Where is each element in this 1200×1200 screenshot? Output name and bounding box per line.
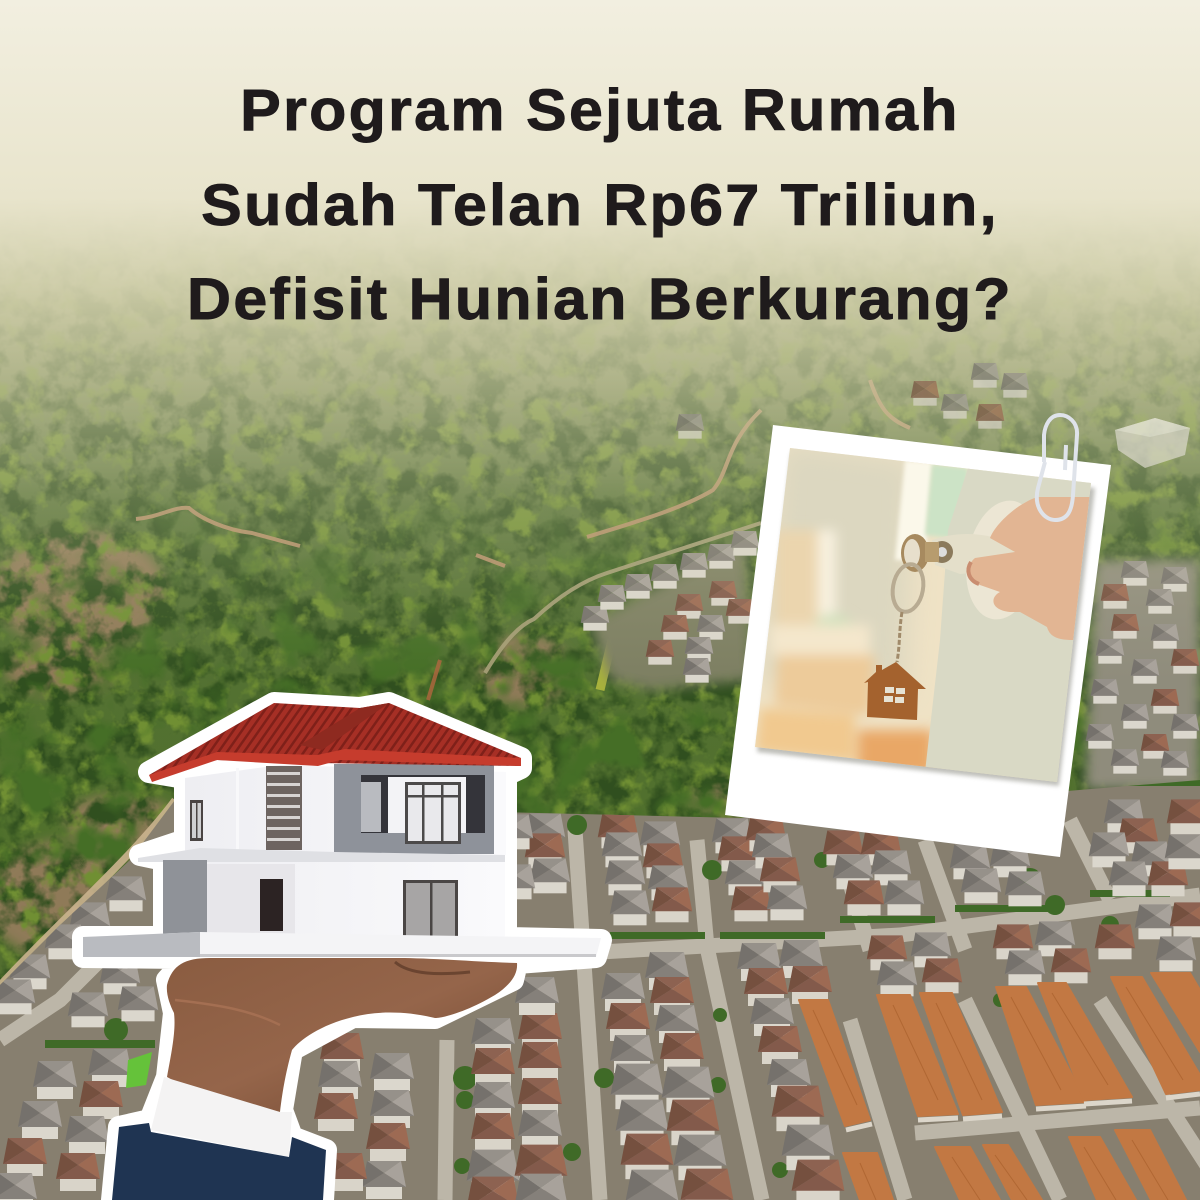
shutters <box>266 766 302 850</box>
platform <box>83 932 601 957</box>
shirt cuff <box>151 1077 292 1157</box>
title: Program Sejuta Rumah <box>240 78 960 143</box>
suit sleeve <box>112 1123 326 1200</box>
key <box>901 534 929 572</box>
wooden house keychain <box>864 662 926 720</box>
bare earth clearings <box>0 530 750 960</box>
bright hedge <box>600 640 612 690</box>
hillside buildings <box>676 363 1190 468</box>
roof <box>149 703 521 775</box>
title <box>187 78 1013 332</box>
dirt roads in forest <box>0 380 910 985</box>
forest and sky base <box>0 298 1200 982</box>
lower floor details <box>163 860 207 936</box>
estate roads <box>0 820 1200 1200</box>
photo: key in door <box>750 440 1100 790</box>
hedges and trees <box>45 770 1200 1178</box>
upper village ground <box>590 540 1200 790</box>
paperclip <box>1037 415 1077 520</box>
upper village houses <box>581 531 1199 776</box>
title: Sudah Telan Rp67 Triliun, <box>201 172 999 238</box>
hand holding model house cut-out <box>83 703 601 1200</box>
hand <box>167 958 517 1112</box>
long orange terrace roofs <box>799 973 1200 1200</box>
title: Defisit Hunian Berkurang? <box>187 267 1013 332</box>
housing estate <box>0 770 1200 1200</box>
grey and brown hip-roof houses <box>0 799 1200 1200</box>
white sticker outline <box>83 703 601 1200</box>
hand <box>969 497 1095 640</box>
polaroid photo <box>725 425 1111 857</box>
fog overlay <box>0 0 1200 680</box>
side window <box>190 800 203 841</box>
grey frame with balcony <box>334 764 494 854</box>
model house walls <box>185 765 506 855</box>
floor slab <box>138 848 505 862</box>
